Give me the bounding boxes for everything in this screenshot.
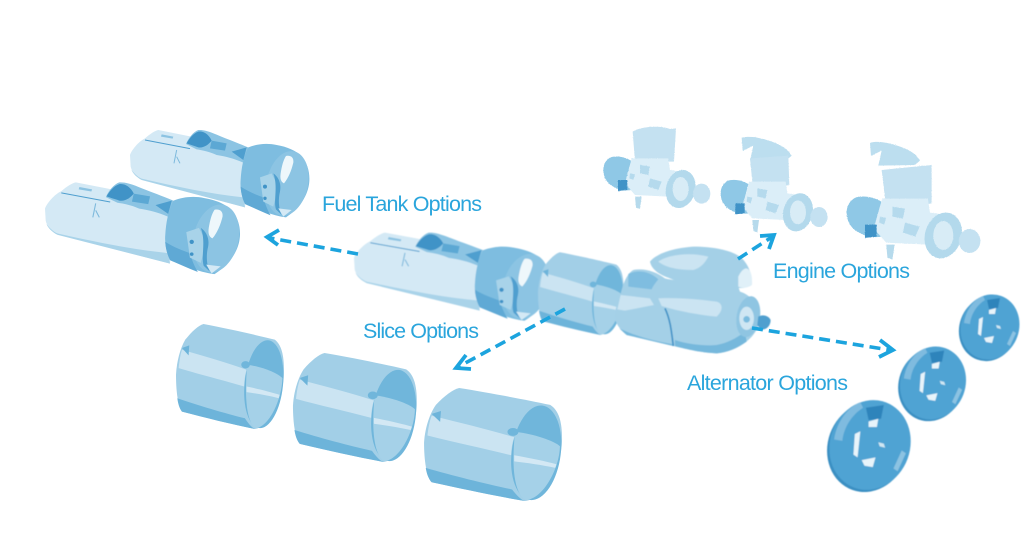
alternator option: large	[815, 389, 923, 504]
slice option 2	[293, 353, 421, 463]
assembly: engine cowling	[615, 247, 771, 353]
assembly: slice	[538, 252, 626, 336]
arrow: to slices	[456, 309, 565, 369]
engine option 2	[721, 137, 828, 235]
alternator option: medium	[888, 337, 976, 431]
label: engine options: Engine Options	[773, 259, 910, 283]
label: alternator options: Alternator Options	[687, 371, 848, 395]
slice option 3	[424, 388, 566, 502]
assembly: fuel tank	[354, 233, 555, 323]
central assembly	[354, 233, 771, 353]
arrow: to alternators	[752, 328, 893, 357]
arrow: to engines	[738, 235, 774, 259]
fuel tank option: upper	[130, 130, 314, 220]
arrow: to fuel tanks	[267, 230, 358, 254]
label: fuel tank options: Fuel Tank Options	[322, 192, 482, 216]
slice option 1	[176, 324, 287, 430]
label: slice options: Slice Options	[363, 319, 479, 343]
alternator option: small	[950, 286, 1024, 369]
engine option 1	[603, 127, 710, 211]
fuel tank option: lower	[45, 182, 245, 276]
engine option 3	[847, 142, 980, 262]
